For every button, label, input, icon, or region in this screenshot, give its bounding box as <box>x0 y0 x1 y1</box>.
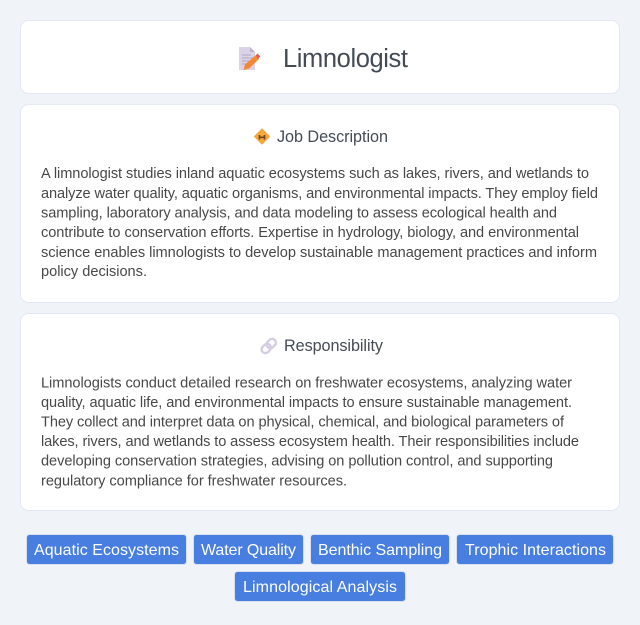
tag: Aquatic Ecosystems <box>26 534 186 564</box>
heading: Responsibility: Responsibility <box>284 337 384 355</box>
tag: Trophic Interactions: Trophic Interactions <box>465 542 606 559</box>
text block: job description: policy decisions. <box>41 264 147 280</box>
text block: responsibility: developing conservation strategies, advising on pollution control, and supporting <box>41 454 553 470</box>
tag: Benthic Sampling <box>310 534 450 564</box>
tag: Water Quality: Water Quality <box>201 542 296 559</box>
tag: Benthic Sampling: Benthic Sampling <box>318 542 442 559</box>
text block: responsibility: lakes, rivers, and wetlands to assess ecosystem health. Their responsibilities include <box>41 434 579 450</box>
text block: responsibility: quality, aquatic life, and environmental impacts to ensure sustainable management. <box>41 395 572 411</box>
text block: job description: analyze water quality, aquatic organisms, and environmental impacts. They employ field <box>41 186 598 202</box>
tag: Limnological Analysis: Limnological Analysis <box>243 579 397 596</box>
panel: job description <box>20 104 620 302</box>
tag: Trophic Interactions <box>456 534 614 564</box>
text block: job description: contribute to conservation efforts. Expertise in hydrology, biology, and environmental <box>41 225 579 241</box>
text block: responsibility: regulatory compliance for freshwater resources. <box>41 474 347 490</box>
tag: Limnological Analysis <box>234 572 406 602</box>
heading: Limnologist: Limnologist <box>283 45 408 73</box>
tag: Water Quality <box>194 534 304 564</box>
icon: orange diamond <box>254 129 270 144</box>
panel: responsibility <box>20 314 620 510</box>
text block: job description: A limnologist studies inland aquatic ecosystems such as lakes, rivers, and wetlands to <box>41 166 589 182</box>
tag: Aquatic Ecosystems: Aquatic Ecosystems <box>34 542 179 559</box>
text block: job description: sampling, laboratory analysis, and data modeling to assess ecological health and <box>41 206 557 222</box>
panel: title <box>20 20 620 94</box>
heading: Job Description: Job Description <box>277 128 388 146</box>
text block: job description <box>41 166 598 280</box>
text block: responsibility: They collect and interpret data on physical, chemical, and biological parameters of <box>41 414 565 430</box>
text block: responsibility: Limnologists conduct detailed research on freshwater ecosystems, analyzing water <box>41 376 572 392</box>
icon: memo with pencil <box>239 47 260 70</box>
icon: chain link <box>260 337 277 355</box>
text block: responsibility <box>41 376 579 490</box>
text block: job description: science enables limnologists to develop sustainable management practices and inform <box>41 245 597 261</box>
